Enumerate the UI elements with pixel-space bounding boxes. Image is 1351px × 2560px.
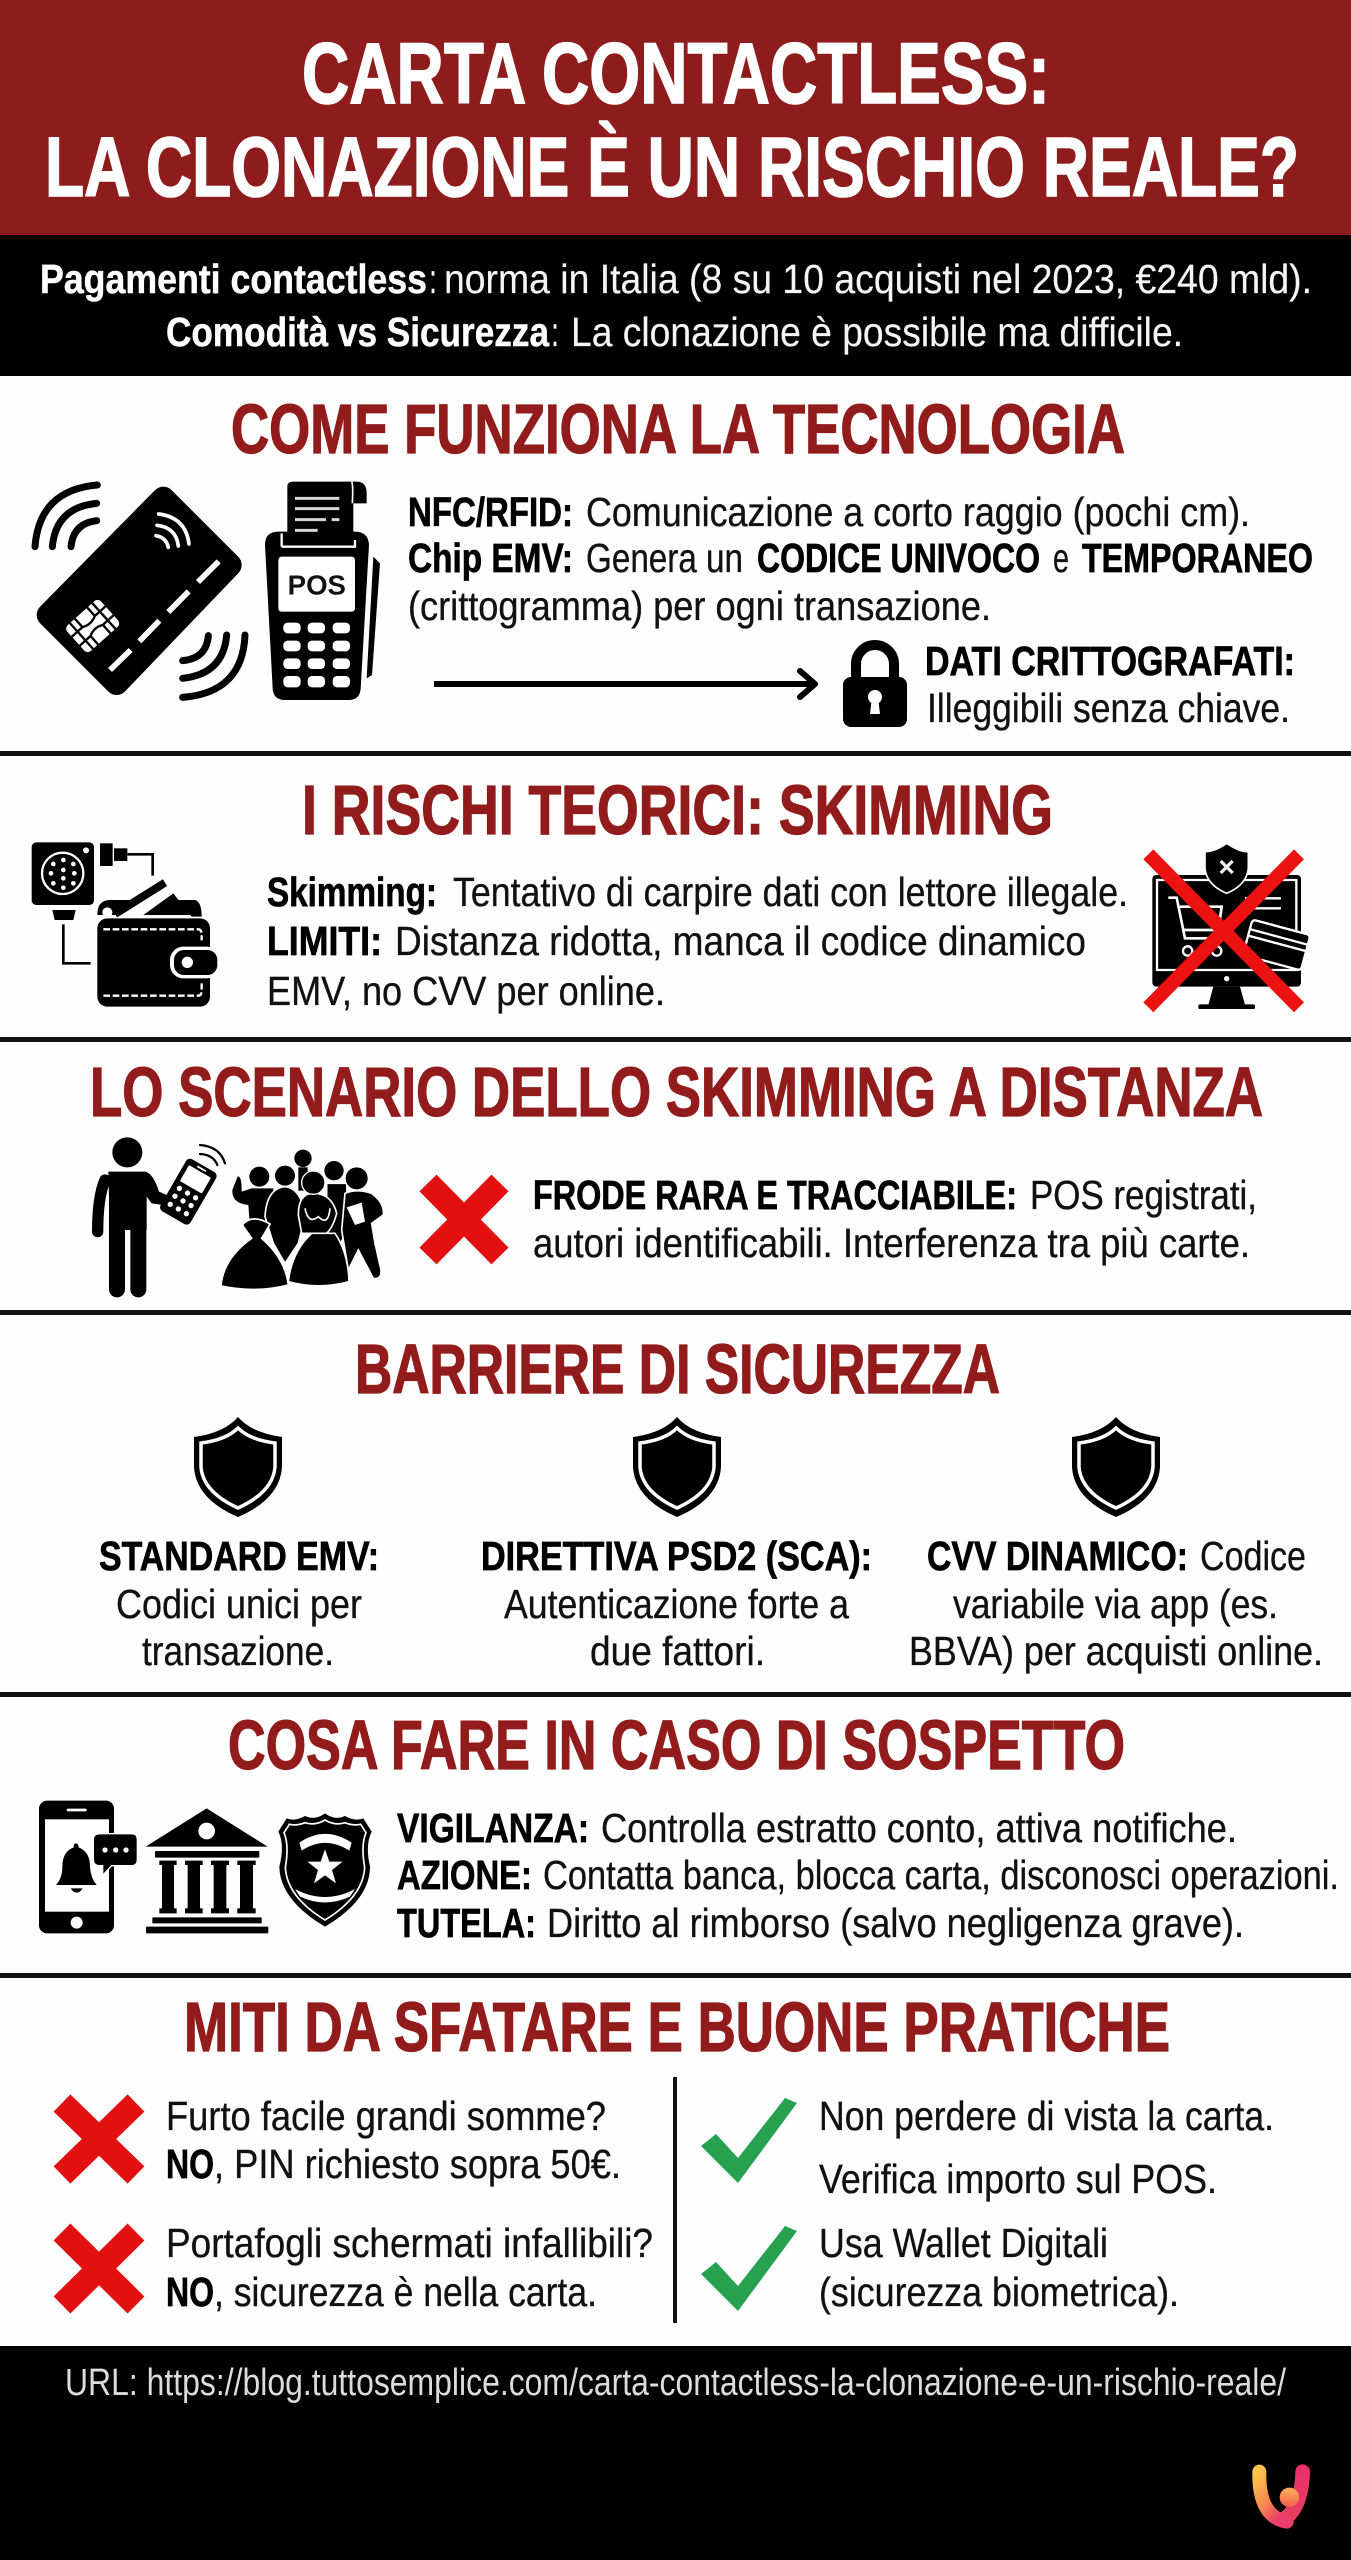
- column: standard EMV: [99, 1417, 379, 1674]
- text: NFC/RFID: Comunicazione a corto raggio (pochi cm).: [586, 489, 1250, 535]
- icon: POS terminal: POS: [288, 569, 346, 600]
- text: myth 2: , sicurezza è nella carta.: [214, 2269, 597, 2315]
- panel: title banner: [0, 0, 1351, 235]
- icon: green check: [701, 2098, 797, 2183]
- text: vigilanza, azione, tutela: TUTELA:: [397, 1900, 536, 1946]
- text: Chip EMV: (crittogramma) per ogni transazione.: [408, 583, 991, 629]
- panel: barriere di sicurezza: [99, 1330, 1323, 1674]
- text: frode rara: FRODE RARA E TRACCIABILE:: [533, 1172, 1017, 1218]
- text: dati crittografati: [925, 638, 1295, 731]
- text: myth 2: [166, 2220, 653, 2315]
- text: frode rara: [533, 1172, 1257, 1266]
- column: direttiva PSD2: [481, 1417, 872, 1674]
- icon: shield: [633, 1417, 721, 1517]
- intro line 1: Pagamenti contactless: [40, 256, 427, 302]
- panel: scenario skimming a distanza: [90, 1053, 1263, 1289]
- icon: red cross: [428, 1183, 500, 1256]
- panel: footer: [0, 2346, 1351, 2560]
- icon: red cross: [62, 2103, 136, 2175]
- panel: come funziona la tecnologia: [35, 390, 1313, 731]
- panel: intro: [0, 235, 1351, 376]
- icon: red cross: [62, 2232, 136, 2305]
- text: skimming: Distanza ridotta, manca il codice dinamico: [395, 918, 1086, 964]
- text: skimming: [267, 869, 1128, 1014]
- text: skimming: Tentativo di carpire dati con lettore illegale.: [453, 869, 1128, 915]
- icon: bank: [146, 1808, 268, 1933]
- text: Chip EMV: e: [1053, 535, 1069, 581]
- icon: shield: [194, 1417, 282, 1517]
- text: NFC/RFID: NFC/RFID:: [408, 489, 573, 535]
- text: dati crittografati: Illeggibili senza chiave.: [927, 685, 1290, 731]
- panel: cosa fare in caso di sospetto: [39, 1706, 1339, 1946]
- text: Codici unici per: [116, 1581, 362, 1627]
- icon: shield: [1072, 1417, 1160, 1517]
- arrow: [434, 671, 815, 697]
- icon: crowd with bags: [221, 1150, 384, 1289]
- icon: skimmer and wallet: [32, 842, 220, 1007]
- text: practice 1: Verifica importo sul POS.: [819, 2156, 1217, 2202]
- text: myth 2: NO: [166, 2269, 214, 2315]
- intro line 1: [40, 256, 1312, 302]
- text: frode rara: autori identificabili. Interferenza tra più carte.: [533, 1220, 1250, 1266]
- text: [481, 1533, 872, 1674]
- icon: green check: [701, 2226, 797, 2311]
- intro line 2: :: [551, 309, 559, 355]
- intro line 2: Comodità vs Sicurezza: [166, 309, 550, 355]
- intro line 1: :: [429, 256, 437, 302]
- text: myth 1: NO: [166, 2141, 214, 2187]
- intro line 2: La clonazione è possibile ma difficile.: [571, 309, 1183, 355]
- text: skimming: Skimming:: [267, 869, 437, 915]
- text: Codice: [1200, 1533, 1306, 1579]
- text: practice 2: [819, 2220, 1179, 2315]
- text: Chip EMV: Chip EMV:: [408, 535, 573, 581]
- text: practice 2: (sicurezza biometrica).: [819, 2269, 1179, 2315]
- panel: i rischi teorici: [32, 771, 1310, 1014]
- icon: crossed-out online shopping: [1148, 843, 1310, 1009]
- text: myth 1: Furto facile grandi somme?: [166, 2093, 606, 2139]
- icon: POS terminal: [265, 482, 380, 700]
- panel: miti e buone pratiche: [62, 1988, 1274, 2323]
- text: myth 2: Portafogli schermati infallibili?: [166, 2220, 653, 2266]
- icon: police badge: [278, 1813, 372, 1927]
- text: [99, 1533, 379, 1674]
- intro line 2: [166, 309, 1183, 355]
- text: frode rara: POS registrati,: [1030, 1172, 1257, 1218]
- icon: contactless card: [35, 485, 245, 697]
- title: [45, 26, 1299, 214]
- text: vigilanza, azione, tutela: Controlla estratto conto, attiva notifiche.: [601, 1805, 1237, 1851]
- text: vigilanza, azione, tutela: VIGILANZA:: [397, 1805, 589, 1851]
- text: transazione.: [142, 1628, 334, 1674]
- heading: I RISCHI TEORICI: SKIMMING: [302, 771, 1053, 849]
- text: due fattori.: [590, 1628, 765, 1674]
- text: DIRETTIVA PSD2 (SCA):: [481, 1533, 872, 1579]
- text: Chip EMV: [408, 535, 1313, 629]
- text: Chip EMV: Genera un: [586, 535, 743, 581]
- text: [909, 1533, 1323, 1674]
- text: Chip EMV: CODICE UNIVOCO: [757, 535, 1040, 581]
- text: practice 1: Non perdere di vista la carta.: [819, 2093, 1274, 2139]
- text: myth 1: , PIN richiesto sopra 50€.: [214, 2141, 621, 2187]
- text: vigilanza, azione, tutela: AZIONE:: [397, 1852, 532, 1898]
- column: CVV dinamico: [909, 1417, 1323, 1674]
- text: STANDARD EMV:: [99, 1533, 379, 1579]
- icon: phone with notification: [39, 1801, 137, 1933]
- text: myth 1: [166, 2093, 621, 2187]
- text: practice 2: Usa Wallet Digitali: [819, 2220, 1108, 2266]
- text: Autenticazione forte a: [504, 1581, 849, 1627]
- text: skimming: LIMITI:: [267, 918, 382, 964]
- icon: person with phone: [98, 1137, 225, 1289]
- icon: logo: [1259, 2472, 1303, 2522]
- text: skimming: EMV, no CVV per online.: [267, 968, 665, 1014]
- text: CVV DINAMICO:: [927, 1533, 1188, 1579]
- title: CARTA CONTACTLESS:: [302, 26, 1050, 122]
- text: vigilanza, azione, tutela: Diritto al rimborso (salvo negligenza grave).: [547, 1900, 1244, 1946]
- text: vigilanza, azione, tutela: [397, 1805, 1339, 1946]
- heading: BARRIERE DI SICUREZZA: [355, 1330, 1000, 1408]
- text: practice 1: [819, 2093, 1274, 2202]
- icon: padlock: [843, 645, 907, 727]
- text: variabile via app (es.: [953, 1581, 1278, 1627]
